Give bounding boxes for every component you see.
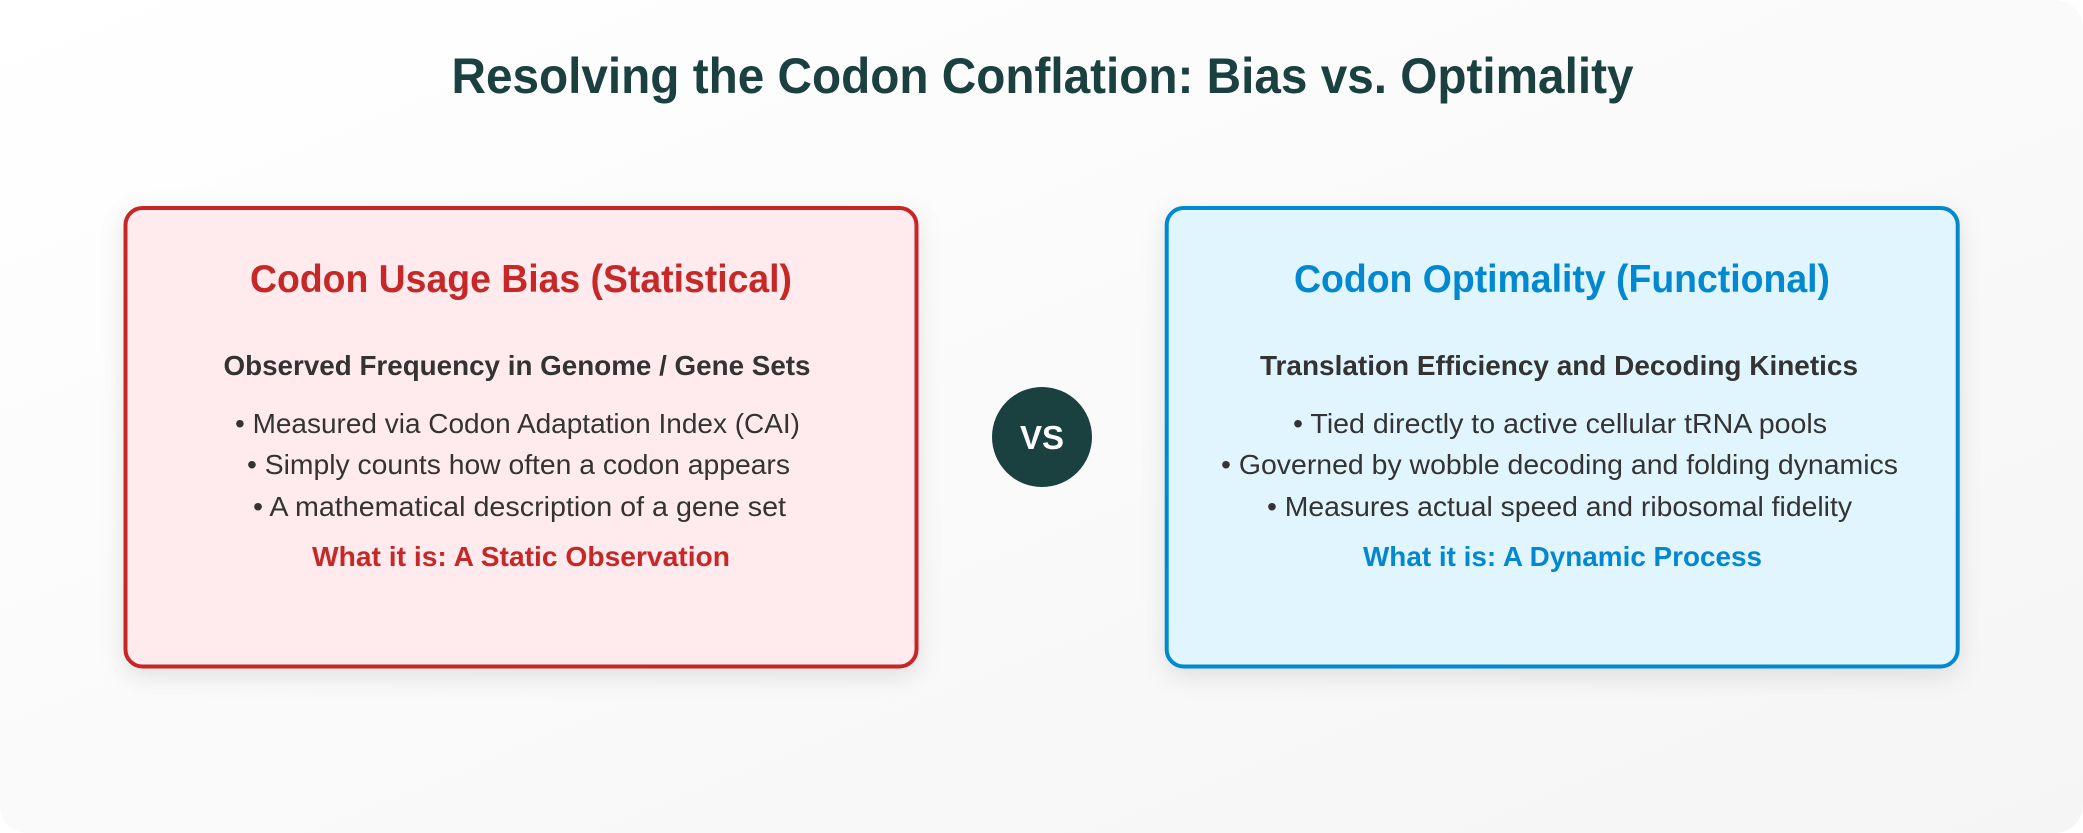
title: Resolving the Codon Conflation: Bias vs. Optimality — [452, 48, 1634, 104]
bullet list: bias — [235, 408, 800, 522]
bullet list: bias: • Measured via Codon Adaptation Index (CAI) — [235, 408, 800, 439]
panel: codon usage bias — [126, 208, 916, 666]
heading: codon usage bias: Codon Usage Bias (Statistical) — [250, 258, 792, 301]
bullet list: bias: • Simply counts how often a codon appears — [247, 449, 790, 480]
vs badge — [992, 387, 1092, 487]
callout: static observation: What it is: A Static Observation — [312, 541, 730, 572]
bullet list: optimality: • Tied directly to active cellular tRNA pools — [1293, 408, 1827, 439]
vs badge: VS — [1020, 419, 1064, 456]
bullet list: optimality — [1221, 408, 1898, 522]
heading: codon optimality: Codon Optimality (Functional) — [1294, 258, 1830, 301]
callout: dynamic process: What it is: A Dynamic Process — [1363, 541, 1762, 572]
bullet list: optimality: • Governed by wobble decoding and folding dynamics — [1221, 449, 1898, 480]
subheading: translation efficiency: Translation Efficiency and Decoding Kinetics — [1260, 350, 1858, 381]
bullet list: bias: • A mathematical description of a gene set — [253, 491, 786, 522]
panel: codon optimality — [1167, 208, 1958, 666]
panel background: blue card — [1167, 208, 1958, 666]
panel background: red card — [126, 208, 916, 666]
subheading: observed frequency: Observed Frequency in Genome / Gene Sets — [224, 350, 810, 381]
bullet list: optimality: • Measures actual speed and ribosomal fidelity — [1267, 491, 1852, 522]
